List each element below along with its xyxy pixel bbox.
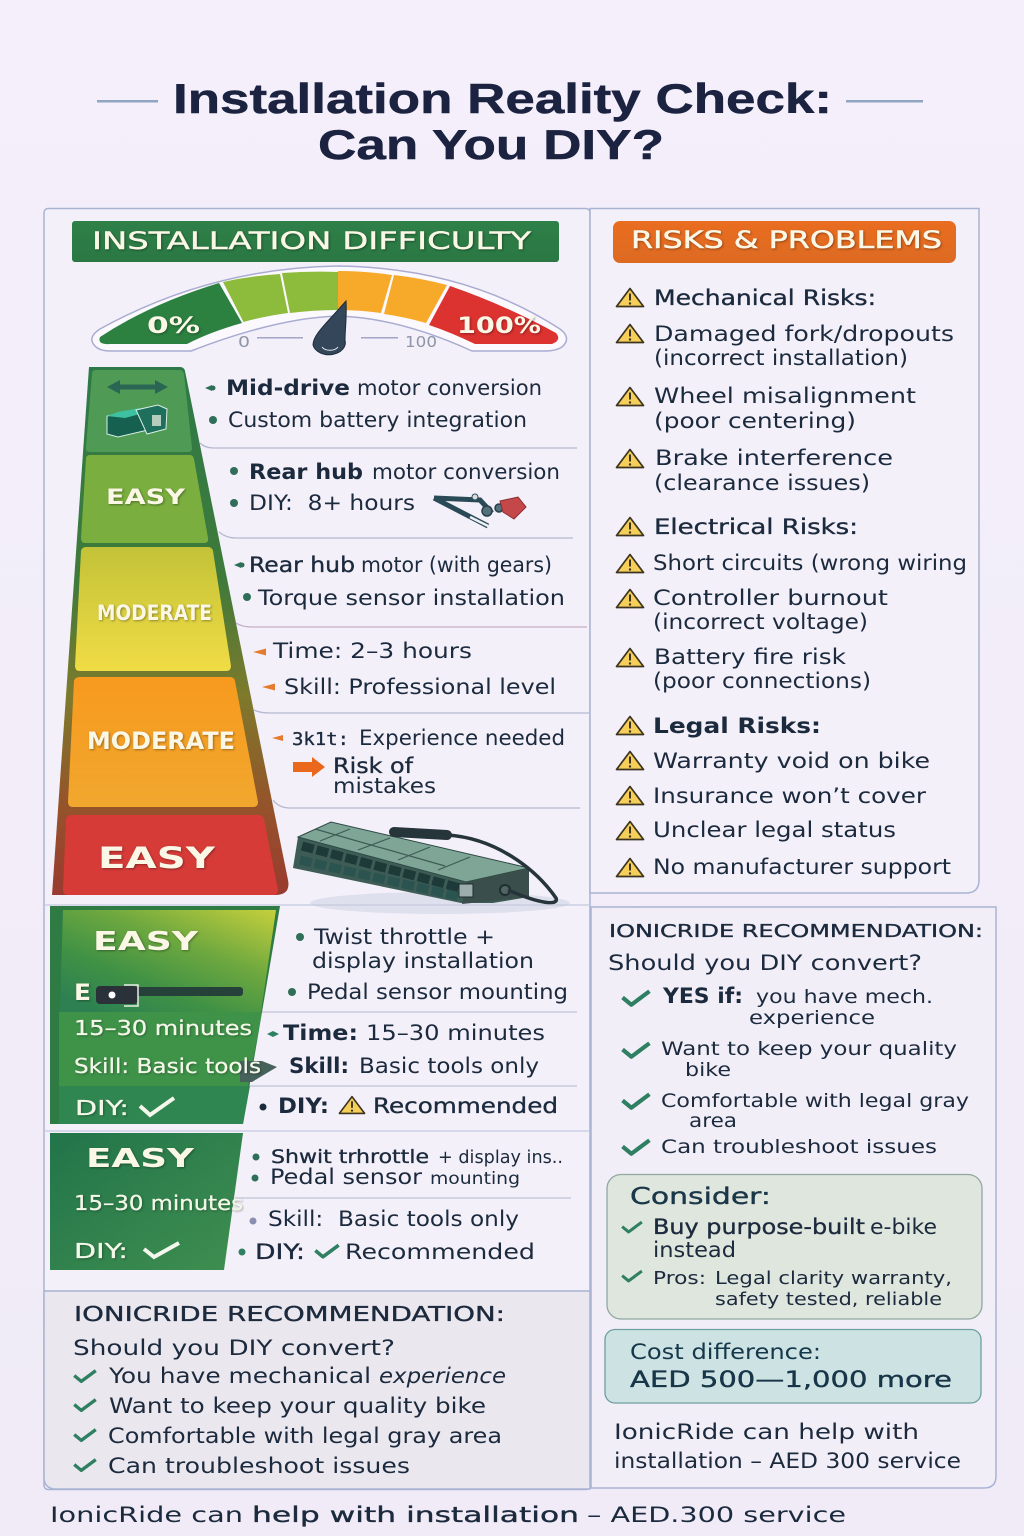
panel: recommendation left: Comfortable with legal gray area bbox=[108, 1424, 502, 1448]
callout: consider bbox=[607, 1174, 982, 1319]
risk: brake interference: (clearance issues) bbox=[654, 471, 870, 495]
divider line bbox=[44, 905, 590, 1291]
list: mid-drive: Mid-drive bbox=[226, 376, 350, 400]
difficulty pyramid bbox=[52, 367, 288, 895]
risk: electrical heading: Electrical Risks: bbox=[654, 515, 858, 539]
checklist: you have mech. bbox=[756, 986, 933, 1008]
list: skill and diy: Skill: Basic tools only bbox=[268, 1207, 519, 1231]
tier 4: moderate: MODERATE bbox=[87, 727, 235, 755]
list: experience needed: Risk of bbox=[333, 754, 414, 778]
checklist: experience bbox=[749, 1007, 875, 1029]
icon: motor and battery bbox=[107, 405, 167, 437]
card: easy lower: EASY bbox=[86, 1144, 196, 1174]
panel: recommendation right bbox=[591, 907, 996, 1488]
panel: recommendation left: You have mechanical bbox=[108, 1364, 371, 1388]
list: time and skill, easy: Basic tools only bbox=[359, 1054, 539, 1078]
tier 2: easy bbox=[81, 455, 208, 543]
gauge: 0% bbox=[147, 314, 200, 339]
risk: warranty: Warranty void on bike bbox=[653, 749, 930, 773]
list: throttle: display installation bbox=[312, 949, 534, 973]
risk: controller burnout: (incorrect voltage) bbox=[653, 610, 868, 634]
card: easy upper: 15–30 minutes bbox=[74, 1016, 252, 1040]
list: throttle short bbox=[235, 1146, 571, 1198]
list: rear hub: Rear hub bbox=[249, 460, 363, 484]
list: throttle bbox=[262, 925, 577, 1012]
callout: consider: Consider: bbox=[630, 1184, 771, 1210]
footer note: – AED.300 service bbox=[587, 1503, 846, 1527]
risk: wheel misalignment bbox=[616, 384, 916, 433]
checklist: Want to keep your quality bbox=[661, 1038, 957, 1060]
risk: damaged fork: Damaged fork/dropouts bbox=[654, 322, 954, 346]
list: mid-drive: Custom battery integration bbox=[228, 408, 527, 432]
list: time and skill, easy: Skill: bbox=[289, 1054, 349, 1078]
list: rear hub: motor conversion bbox=[372, 460, 560, 484]
list: experience needed: mistakes bbox=[333, 774, 436, 798]
list: rear hub motor bbox=[234, 553, 587, 627]
illustration: controller bbox=[293, 822, 570, 914]
tier 5: easy: EASY bbox=[98, 841, 216, 875]
risk: legal heading: Legal Risks: bbox=[653, 714, 821, 738]
tier 2: easy: EASY bbox=[106, 485, 186, 509]
checklist: area bbox=[689, 1110, 737, 1132]
card: easy lower: 15–30 minutes bbox=[74, 1191, 243, 1215]
list: diy recommended: Recommended bbox=[373, 1094, 558, 1118]
card: easy lower: DIY: bbox=[74, 1239, 128, 1263]
risk: short circuits: Short circuits (wrong wiring bbox=[653, 551, 967, 575]
card: easy lower bbox=[50, 1133, 243, 1270]
risk: mechanical heading: Mechanical Risks: bbox=[654, 286, 876, 310]
panel: risks and problems bbox=[590, 208, 979, 893]
risk: damaged fork: (incorrect installation) bbox=[654, 346, 908, 370]
list: time and skill, easy: Time: bbox=[283, 1021, 358, 1045]
list: throttle short: Shwit trhrottle bbox=[271, 1146, 429, 1168]
panel: recommendation left: Should you DIY convert? bbox=[73, 1336, 395, 1360]
callout: cost difference bbox=[605, 1330, 981, 1403]
title: Installation Reality Check: bbox=[173, 75, 832, 122]
heading: risks and problems: RISKS & PROBLEMS bbox=[631, 226, 942, 254]
list: throttle short: Pedal sensor bbox=[270, 1165, 422, 1189]
checklist: YES if: bbox=[662, 984, 743, 1008]
panel: installation difficulty bbox=[44, 208, 590, 1490]
risk: battery fire bbox=[616, 645, 871, 693]
list: mid-drive: motor conversion bbox=[357, 376, 542, 400]
risk: battery fire: (poor connections) bbox=[653, 669, 871, 693]
callout: consider: Pros: bbox=[653, 1268, 706, 1289]
subheading: should you diy: Should you DIY convert? bbox=[608, 951, 922, 975]
text: service note: installation – AED 300 service bbox=[614, 1449, 961, 1473]
footer note: help with installation bbox=[252, 1503, 579, 1527]
list: experience needed: 3k1t: bbox=[292, 729, 349, 750]
text: service note bbox=[614, 1420, 961, 1473]
risk: legal status: Unclear legal status bbox=[653, 818, 896, 842]
heading: installation difficulty: INSTALLATION DIFFICULTY bbox=[92, 227, 531, 255]
checklist bbox=[623, 984, 969, 1158]
list: diy recommended: DIY: bbox=[278, 1094, 329, 1118]
icon: wrench tools bbox=[434, 494, 526, 526]
gauge: 100 bbox=[405, 333, 437, 351]
risk: battery fire: Battery fire risk bbox=[654, 645, 847, 669]
tier 3: moderate: MODERATE bbox=[97, 601, 212, 625]
list: rear hub motor: Rear hub bbox=[249, 553, 355, 577]
checklist: Can troubleshoot issues bbox=[661, 1136, 937, 1158]
panel: recommendation left: Can troubleshoot issues bbox=[108, 1454, 410, 1478]
callout: cost difference: Cost difference: bbox=[630, 1340, 821, 1364]
tier 1: hard bbox=[86, 370, 192, 452]
icon: white check bbox=[144, 1243, 179, 1257]
gauge: 0 bbox=[238, 333, 250, 351]
gauge bbox=[92, 266, 567, 355]
list: rear hub: DIY: 8+ hours bbox=[249, 491, 415, 515]
list: mid-drive bbox=[200, 376, 577, 448]
list: time and skill: Time: 2–3 hours bbox=[272, 639, 472, 663]
list: rear hub bbox=[219, 460, 573, 538]
callout: consider: instead bbox=[653, 1238, 736, 1262]
risk: controller burnout bbox=[616, 586, 888, 634]
list: skill and diy: DIY: bbox=[255, 1240, 305, 1264]
risk: brake interference: Brake interference bbox=[655, 446, 893, 470]
icon: gauge needle bbox=[313, 301, 346, 355]
icon: double arrow bbox=[107, 380, 168, 394]
tier 5: easy bbox=[63, 815, 278, 895]
footer note bbox=[50, 1503, 846, 1527]
callout: cost difference: AED 500—1,000 more bbox=[630, 1368, 952, 1393]
card: easy upper: E bbox=[74, 981, 91, 1006]
card: easy upper bbox=[50, 906, 280, 1124]
tier 3: moderate bbox=[75, 547, 231, 671]
risk: brake interference bbox=[616, 446, 893, 495]
panel: recommendation left bbox=[44, 1291, 590, 1489]
risk: electrical heading bbox=[616, 515, 858, 539]
list: rear hub motor: Torque sensor installation bbox=[257, 586, 565, 610]
list: skill and diy bbox=[238, 1207, 535, 1264]
callout: consider: e-bike bbox=[870, 1215, 937, 1239]
card: easy upper: DIY: bbox=[75, 1096, 129, 1120]
icon: warning bbox=[339, 1097, 365, 1113]
list: throttle short: + display ins.. bbox=[438, 1147, 563, 1168]
list: diy recommended bbox=[260, 1094, 558, 1118]
list: rear hub motor: motor (with gears) bbox=[361, 553, 552, 577]
list: skill and diy: Recommended bbox=[345, 1240, 535, 1264]
heading: recommendation: IONICRIDE RECOMMENDATION: bbox=[609, 921, 983, 942]
risk: manufacturer support: No manufacturer support bbox=[653, 855, 951, 879]
list: time and skill bbox=[253, 639, 590, 713]
card: easy upper: EASY bbox=[93, 927, 200, 957]
risk: legal heading bbox=[616, 714, 821, 738]
title bbox=[97, 75, 923, 168]
icon: check bbox=[315, 1245, 339, 1257]
risk: wheel misalignment: Wheel misalignment bbox=[654, 384, 916, 408]
list: time and skill, easy: 15–30 minutes bbox=[366, 1021, 545, 1045]
panel: recommendation left: Want to keep your quality bike bbox=[109, 1394, 486, 1418]
callout: consider: safety tested, reliable bbox=[715, 1289, 942, 1310]
risk: controller burnout: Controller burnout bbox=[653, 586, 888, 610]
list: throttle: Twist throttle + bbox=[313, 925, 495, 949]
icon: white check bbox=[140, 1098, 174, 1115]
panel: recommendation left: experience bbox=[379, 1364, 506, 1388]
gauge: 100% bbox=[457, 314, 541, 339]
checklist: Comfortable with legal gray bbox=[661, 1090, 969, 1112]
icon: throttle bbox=[96, 985, 243, 1006]
risk: damaged fork bbox=[616, 322, 954, 370]
text: service note: IonicRide can help with bbox=[614, 1420, 919, 1444]
heading: risks and problems bbox=[613, 221, 956, 263]
callout: consider: Legal clarity warranty, bbox=[715, 1268, 952, 1289]
callout: consider: Buy purpose-built bbox=[653, 1215, 865, 1239]
card: easy upper: Skill: Basic tools bbox=[74, 1054, 261, 1078]
risk: wheel misalignment: (poor centering) bbox=[654, 409, 856, 433]
list: time and skill: Skill: Professional level bbox=[284, 675, 556, 699]
title: Can You DIY? bbox=[318, 121, 664, 168]
footer note: IonicRide can bbox=[50, 1503, 243, 1527]
list: throttle short: mounting bbox=[430, 1169, 520, 1189]
list: throttle: Pedal sensor mounting bbox=[307, 980, 568, 1004]
checklist: bike bbox=[685, 1059, 731, 1081]
icon: dark arrow bbox=[240, 1061, 277, 1082]
icon: orange arrow bbox=[293, 757, 325, 777]
list: experience needed bbox=[272, 726, 580, 808]
panel: recommendation left: IONICRIDE RECOMMENDATION: bbox=[74, 1302, 505, 1326]
risk: insurance: Insurance won’t cover bbox=[653, 784, 926, 808]
heading: installation difficulty bbox=[72, 221, 559, 262]
tier 4: moderate bbox=[68, 677, 258, 807]
list: time and skill, easy bbox=[250, 1021, 577, 1086]
list: experience needed: Experience needed bbox=[359, 726, 565, 750]
